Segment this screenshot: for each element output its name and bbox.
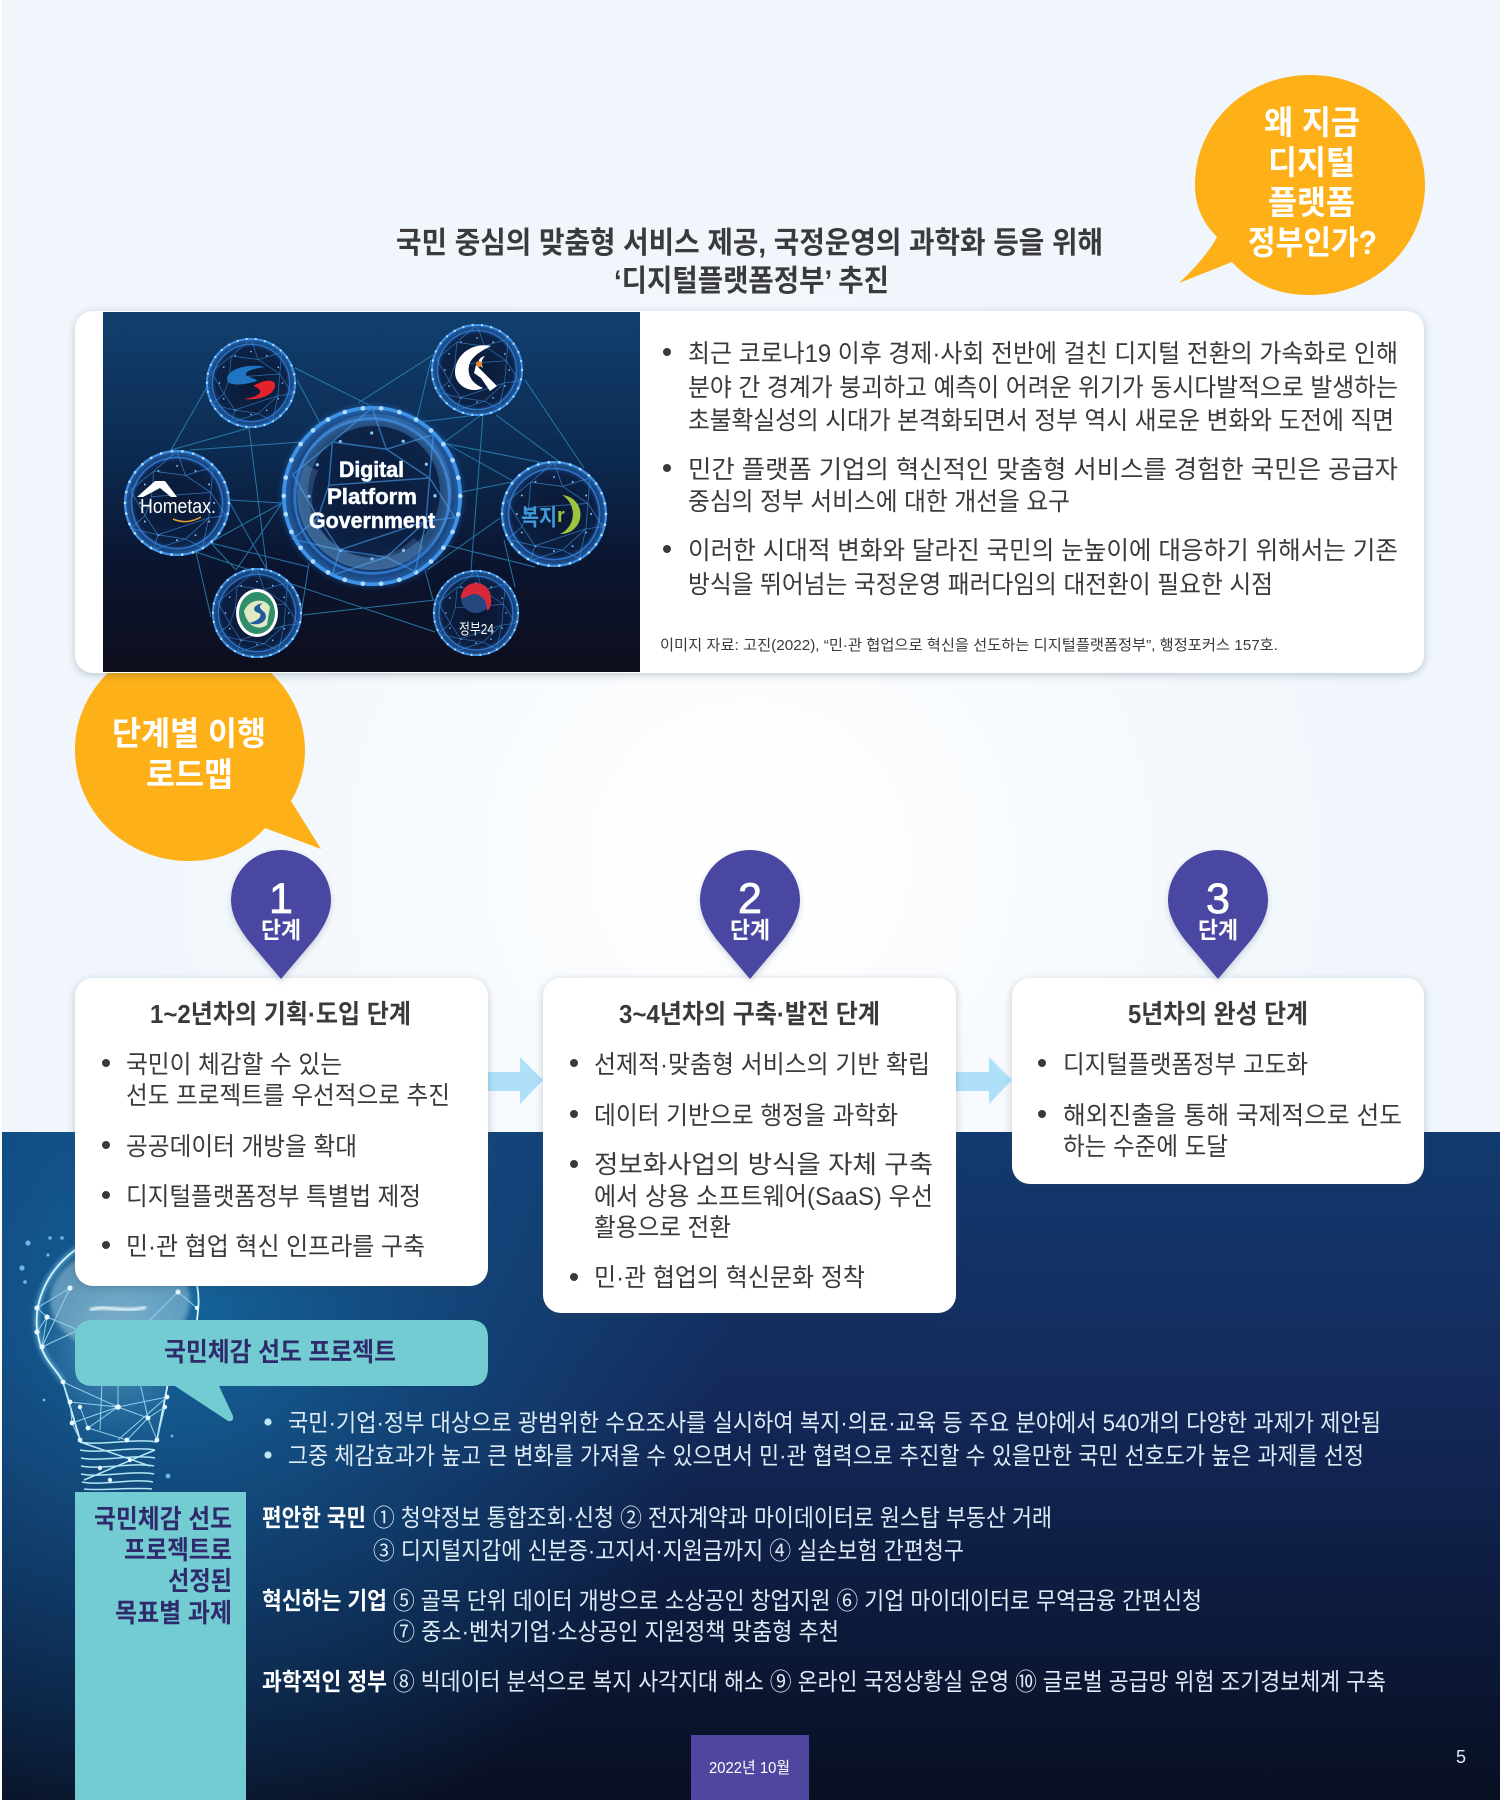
panel: stage 1: 민·관 협업 혁신 인프라를 구축: [126, 1233, 425, 1261]
panel: stage 2: 정보화사업의 방식을 자체 구축: [594, 1151, 933, 1179]
central label: Government: [309, 508, 436, 533]
text block: scientific government tasks: ⑧ 빅데이터 분석으로 복지 사각지대 해소 ⑨ 온라인 국정상황실 운영 ⑩ 글로벌 공급망 위험 조기경보체계 구축: [393, 1669, 1386, 1696]
pin: stage 3: 3: [1206, 875, 1230, 923]
text block: innovative business tasks: ⑤ 골목 단위 데이터 개방으로 소상공인 창업지원 ⑥ 기업 마이데이터로 무역금융 간편신청: [393, 1588, 1202, 1615]
text block: background bullets: 이러한 시대적 변화와 달라진 국민의 눈높이에 대응하기 위해서는 기존: [688, 537, 1398, 565]
text block: project selection bullets: [264, 1410, 1381, 1470]
text block: project selection bullets: 국민·기업·정부 대상으로 광범위한 수요조사를 실시하여 복지·의료·교육 등 주요 분야에서 540개의 다양한 과제가 제안됨: [288, 1410, 1381, 1437]
panel: stage 1: 1~2년차의 기획·도입 단계: [150, 999, 411, 1029]
text block: convenient citizens tasks: 편안한 국민: [262, 1505, 366, 1532]
panel: stage 1: [75, 978, 488, 1286]
title: [396, 227, 1103, 298]
date tag: [691, 1735, 809, 1800]
title: 국민 중심의 맞춤형 서비스 제공, 국정운영의 과학화 등을 위해: [396, 227, 1103, 260]
panel: stage 2: [543, 978, 956, 1313]
panel: stage 3: [1012, 978, 1424, 1184]
node: Hometax logo: [124, 450, 230, 556]
node: Hometax logo: Hometax.: [140, 496, 216, 518]
pin: stage 1: [231, 850, 331, 979]
speech bubble: why now: 플랫폼: [1268, 184, 1355, 221]
text block: convenient citizens tasks: ① 청약정보 통합조회·신청 ② 전자계약과 마이데이터로 원스탑 부동산 거래: [373, 1505, 1052, 1532]
panel: stage 3: 5년차의 완성 단계: [1128, 999, 1308, 1029]
pin: stage 2: [700, 850, 800, 979]
arrow: stage 2 to stage 3: [955, 1057, 1012, 1104]
node: Government 24 logo: [433, 570, 519, 656]
panel: stage 3: 해외진출을 통해 국제적으로 선도: [1063, 1102, 1402, 1130]
node: Government 24 logo: 정부24: [459, 621, 494, 638]
central network globe: [280, 404, 464, 588]
panel: selected tasks label: 목표별 과제: [115, 1598, 232, 1628]
speech bubble: roadmap: [75, 640, 321, 861]
text block: scientific government tasks: 과학적인 정부: [262, 1669, 387, 1696]
panel: stage 1: 공공데이터 개방을 확대: [126, 1133, 357, 1161]
date tag: 2022년 10월: [709, 1759, 790, 1777]
page number: 5: [1456, 1747, 1466, 1767]
text block: innovative business tasks: 혁신하는 기업: [262, 1588, 387, 1615]
pin: stage 1: 단계: [261, 917, 301, 943]
central label: [310, 460, 436, 528]
node: Bokjiro logo: r: [557, 505, 565, 527]
speech bubble: why now: 왜 지금: [1264, 104, 1360, 141]
illustration: digital platform government network: [103, 312, 640, 672]
light page background: [0, 0, 1500, 1132]
icon: network light bulb: [19, 1236, 199, 1490]
panel: stage 1: 디지털플랫폼정부 특별법 제정: [126, 1183, 421, 1211]
panel: stage 2: 데이터 기반으로 행정을 과학화: [594, 1102, 898, 1130]
panel: stage 1: 국민이 체감할 수 있는: [126, 1051, 342, 1079]
panel: stage 2: 활용으로 전환: [594, 1214, 731, 1242]
central label: Platform: [327, 484, 417, 509]
text block: background bullets: 초불확실성의 시대가 본격화되면서 정부 역시 새로운 변화와 도전에 직면: [688, 407, 1394, 435]
image source caption: 이미지 자료: 고진(2022), “민·관 협업으로 혁신을 선도하는 디지털플랫폼정부”, 행정포커스 157호.: [660, 637, 1278, 654]
panel: selected tasks label: 국민체감 선도: [94, 1504, 232, 1534]
text block: background bullets: 방식을 뛰어넘는 국정운영 패러다임의 대전환이 필요한 시점: [688, 571, 1273, 599]
speech bubble: why now: 정부인가?: [1248, 224, 1377, 261]
text block: background bullets: 중심의 정부 서비스에 대한 개선을 요구: [688, 488, 1070, 516]
title: ‘디지털플랫폼정부’ 추진: [614, 265, 889, 298]
text block: innovative business tasks: [262, 1588, 1202, 1646]
node: blue and red logo: [206, 338, 296, 428]
pin: stage 2: 2: [738, 875, 762, 923]
text block: convenient citizens tasks: ③ 디지털지갑에 신분증·고지서·지원금까지 ④ 실손보험 간편청구: [373, 1538, 964, 1565]
node: green emblem: [212, 568, 302, 658]
callout: flagship project heading: 국민체감 선도 프로젝트: [164, 1337, 396, 1367]
panel: selected tasks label: 선정된: [168, 1566, 232, 1596]
panel: selected tasks label: [75, 1492, 246, 1800]
panel: stage 3: 디지털플랫폼정부 고도화: [1063, 1051, 1308, 1079]
pin: stage 1: 1: [269, 875, 293, 923]
node: Bokjiro logo: 복지: [521, 504, 557, 530]
text block: project selection bullets: 그중 체감효과가 높고 큰 변화를 가져올 수 있으면서 민·관 협력으로 추진할 수 있을만한 국민 선호도가 높은 과제를 선정: [288, 1443, 1364, 1470]
panel: stage 2: 민·관 협업의 혁신문화 정착: [594, 1264, 865, 1292]
speech bubble: roadmap: 단계별 이행: [112, 715, 266, 752]
pin: stage 2: 단계: [730, 917, 770, 943]
panel: stage 2: 에서 상용 소프트웨어(SaaS) 우선: [594, 1183, 933, 1211]
pin: stage 3: 단계: [1198, 917, 1238, 943]
panel: selected tasks label: 프로젝트로: [124, 1535, 232, 1565]
text block: background bullets: 분야 간 경계가 붕괴하고 예측이 어려운 위기가 동시다발적으로 발생하는: [688, 374, 1398, 402]
pin: stage 3: [1168, 850, 1268, 979]
panel: why digital platform government: [75, 311, 1424, 673]
text block: innovative business tasks: ⑦ 중소·벤처기업·소상공인 지원정책 맞춤형 추천: [393, 1619, 839, 1646]
node: Bokjiro logo: [501, 461, 607, 567]
speech bubble: why now: 디지털: [1268, 144, 1355, 181]
node: cursor logo: [431, 324, 523, 416]
panel: stage 3: 하는 수준에 도달: [1063, 1133, 1228, 1161]
central label: Digital: [339, 457, 404, 482]
text block: convenient citizens tasks: [262, 1505, 1052, 1565]
panel: stage 2: 3~4년차의 구축·발전 단계: [619, 999, 880, 1029]
text block: background bullets: 최근 코로나19 이후 경제·사회 전반에 걸친 디지털 전환의 가속화로 인해: [688, 340, 1398, 368]
callout: flagship project heading: [75, 1320, 488, 1421]
panel: stage 2: 선제적·맞춤형 서비스의 기반 확립: [594, 1051, 930, 1079]
speech bubble: roadmap: 로드맵: [146, 756, 233, 793]
text block: background bullets: 민간 플랫폼 기업의 혁신적인 맞춤형 서비스를 경험한 국민은 공급자: [688, 456, 1398, 484]
arrow: stage 1 to stage 2: [487, 1057, 543, 1104]
text block: background bullets: [663, 340, 1398, 599]
speech bubble: why now: [1179, 75, 1425, 295]
panel: stage 1: 선도 프로젝트를 우선적으로 추진: [126, 1082, 450, 1110]
